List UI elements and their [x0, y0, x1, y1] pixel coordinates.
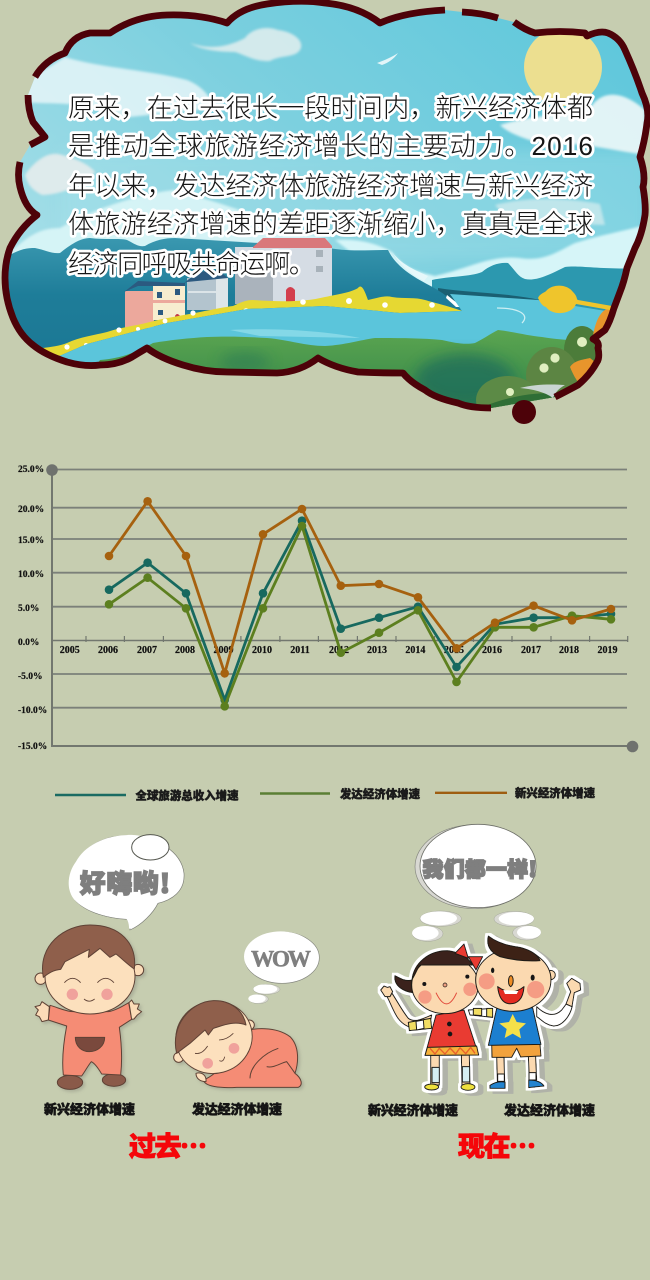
intro paragraph: 体旅游经济增速的差距逐渐缩小，真真是全球 [68, 209, 593, 239]
x axis labels: 2019 [598, 645, 618, 656]
x axis labels: 2007 [137, 645, 157, 656]
x axis labels: 2012 [329, 645, 349, 656]
y axis labels: -5.0% [18, 672, 43, 682]
heading: present: 现在… [458, 1125, 536, 1164]
x axis labels: 2008 [175, 645, 195, 656]
intro paragraph: 经济同呼吸共命运啊。 [68, 249, 315, 279]
y axis labels: 10.0% [18, 570, 44, 580]
x axis labels: 2009 [214, 645, 234, 656]
chart legend: 全球旅游总收入增速 [136, 788, 239, 804]
y axis labels: 20.0% [18, 505, 44, 515]
speech bubble: 好嗨哟 [69, 835, 184, 930]
panel: the present [368, 824, 595, 1164]
x axis labels: 2013 [367, 645, 387, 656]
chart legend: 发达经济体增速 [340, 786, 421, 802]
series: global tourism revenue growth [105, 516, 615, 704]
x axis labels: 2006 [98, 645, 118, 656]
speech bubble: 我们都一样: 我们都一样! [423, 853, 537, 883]
bird [377, 53, 398, 65]
x axis labels [60, 645, 617, 656]
x axis labels: 2018 [559, 645, 579, 656]
y axis labels: 15.0% [18, 536, 44, 546]
y axis labels: -10.0% [18, 706, 47, 716]
y axis labels: 0.0% [18, 638, 39, 648]
x axis labels: 2016 [482, 645, 502, 656]
village houses [124, 238, 332, 328]
label: emerging economies: 新兴经济体增速 [368, 1100, 458, 1119]
x axis labels: 2015 [444, 645, 464, 656]
chart legend: 新兴经济体增速 [515, 785, 596, 801]
intro paragraph: 原来，在过去很长一段时间内，新兴经济体都 [68, 93, 593, 123]
panel: illustrated intro cloud [0, 0, 650, 424]
orange leaves [570, 309, 610, 381]
y axis labels: 5.0% [18, 604, 39, 614]
speech bubble: 我们都一样 [412, 824, 541, 941]
horizontal grid lines [52, 470, 627, 708]
thought bubble: WOW: WOW [251, 947, 311, 973]
series: emerging economies growth [105, 497, 615, 678]
axes [52, 470, 632, 746]
clouds [10, 28, 645, 290]
x axis labels: 2011 [290, 645, 310, 656]
yellow flower [538, 286, 612, 313]
line chart: tourism growth rates [18, 464, 638, 752]
label: emerging economies: 新兴经济体增速 [44, 1099, 135, 1118]
characters: girl and boy [381, 936, 581, 1090]
character: boy [468, 936, 581, 1088]
x axis labels: 2010 [252, 645, 272, 656]
y axis labels [18, 465, 47, 752]
big mountain [8, 238, 461, 356]
axis end dots [46, 464, 638, 752]
x axis labels: 2017 [521, 645, 541, 656]
yellow shore [43, 287, 462, 357]
outline dot [512, 400, 536, 424]
series: developed economies growth [105, 522, 615, 711]
speech bubble: 好嗨哟: 好嗨哟! [80, 865, 170, 901]
heading: past: 过去… [129, 1125, 207, 1164]
y axis labels: 25.0% [18, 465, 44, 475]
intro paragraph: 是推动全球旅游经济增长的主要动力。2016 [68, 131, 593, 161]
x axis labels: 2014 [405, 645, 425, 656]
lake [60, 294, 604, 362]
label: developed economies: 发达经济体增速 [504, 1100, 595, 1119]
green land [98, 330, 578, 408]
intro paragraph: 年以来，发达经济体旅游经济增速与新兴经济 [68, 171, 593, 201]
dark cloud outline [5, 1, 648, 408]
bushes [476, 326, 596, 408]
label: developed economies: 发达经济体增速 [192, 1099, 282, 1118]
character: sleeping baby [168, 993, 301, 1088]
character: standing baby [35, 925, 144, 1089]
character: girl [381, 944, 483, 1090]
chart legend [55, 785, 596, 804]
far mountains [432, 262, 624, 312]
illustrated landscape scene [0, 0, 650, 424]
intro paragraph [68, 93, 593, 279]
x axis labels: 2005 [60, 645, 80, 656]
sun [524, 28, 602, 106]
y axis labels: -15.0% [18, 742, 47, 752]
thought bubble: WOW [244, 931, 319, 1004]
panel: the past [35, 835, 319, 1164]
